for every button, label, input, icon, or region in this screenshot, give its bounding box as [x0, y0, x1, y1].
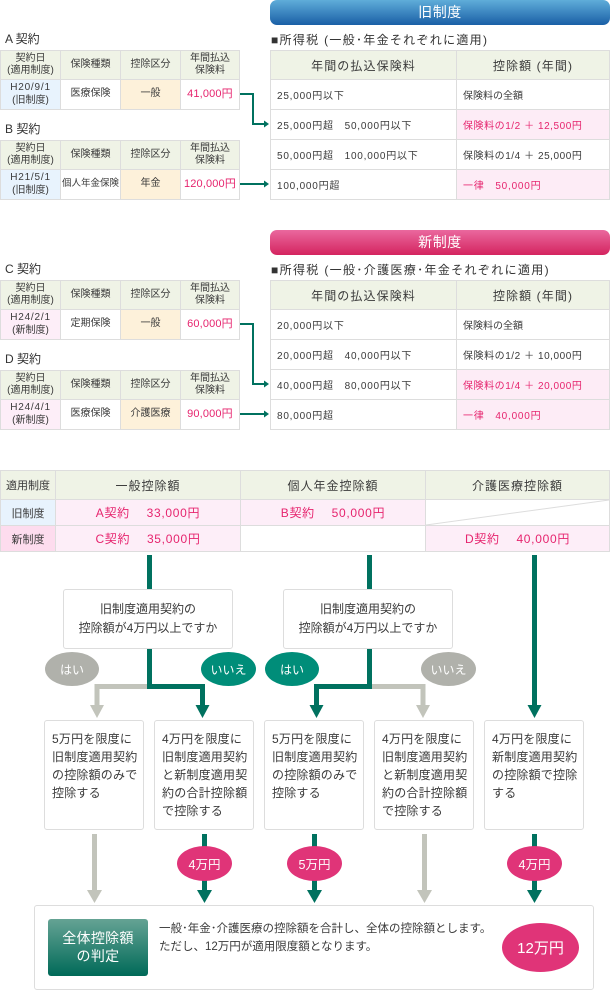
arrows: contracts to tables [240, 93, 269, 418]
contract C table: 保険料 [195, 295, 225, 306]
summary table: 個人年金控除額 [287, 478, 378, 492]
old system deduction table: 控除額 (年間) [493, 58, 573, 72]
summary table: 適用制度 [6, 480, 50, 492]
contract B table: 契約日 [15, 142, 45, 154]
contract B table [0, 140, 240, 200]
badge: 12万円 [502, 923, 579, 972]
oval: yes left [45, 652, 99, 686]
contract D table: 年間払込 [190, 372, 230, 384]
contract B table: 個人年金保険 [62, 178, 119, 189]
new system deduction table: 控除額 (年間) [493, 288, 573, 302]
result box 3: 5万円を限度に 旧制度適用契約 の控除額のみで 控除する [272, 732, 357, 800]
contract A table: 41,000円 [187, 88, 233, 100]
contract A table: (旧制度) [12, 94, 49, 106]
judgement label [48, 919, 148, 976]
summary table: 介護医療控除額 [472, 478, 563, 492]
contract A table [0, 50, 240, 110]
contract A table: 保険種類 [70, 59, 110, 70]
contract D table: 医療保険 [70, 408, 110, 419]
new system deduction table: 20,000円以下 [277, 321, 345, 332]
old system deduction table: 保険料の全額 [463, 91, 523, 102]
badge: 4万円: 4万円 [189, 858, 220, 872]
question box left: 旧制度適用契約の [100, 602, 196, 616]
old system deduction table: 100,000円超 [277, 181, 340, 192]
old system deduction table: 50,000円超 100,000円以下 [277, 151, 419, 162]
contract B table: (旧制度) [12, 184, 49, 196]
result box 2 [154, 720, 254, 830]
contract B table: 保険種類 [70, 149, 110, 160]
question box left: 控除額が4万円以上ですか [79, 621, 217, 635]
contract D table: 保険種類 [70, 379, 110, 390]
badge: 12万円: 12万円 [517, 940, 564, 957]
result box 3 [264, 720, 364, 830]
new system banner: 新制度 [418, 234, 462, 250]
contract A table: 一般 [140, 88, 160, 99]
contract C table: 契約日 [15, 282, 45, 294]
contract C table: H24/2/1 [10, 312, 51, 323]
contract D table [0, 370, 240, 430]
result box 5: 4万円を限度に 新制度適用契約 の控除額で控除 する [492, 732, 577, 800]
summary table: C契約 35,000円 [95, 532, 201, 546]
contract C table: 60,000円 [187, 318, 233, 330]
summary table: 一般控除額 [115, 478, 180, 492]
old system banner: 旧制度 [418, 4, 462, 20]
badge: 4万円 [507, 846, 562, 881]
badge: 4万円 [177, 846, 232, 881]
contract D table: 保険料 [195, 385, 225, 396]
contract B table: 控除区分 [130, 149, 170, 160]
result box 2: 4万円を限度に 旧制度適用契約 と新制度適用契 約の合計控除額 で控除する [162, 732, 247, 818]
oval: yes left: はい [60, 662, 84, 676]
contract C table: 年間払込 [190, 282, 230, 294]
summary table: A契約 33,000円 [96, 506, 200, 520]
contract B table: 120,000円 [184, 178, 236, 190]
result box 1 [44, 720, 144, 830]
contract D table: H24/4/1 [10, 402, 51, 413]
new system deduction table: 保険料の全額 [463, 321, 523, 332]
old system deduction table: 一律 50,000円 [463, 181, 541, 192]
old system heading: ■所得税 (一般･年金それぞれに適用) [271, 33, 488, 47]
contract A table: 医療保険 [70, 88, 110, 99]
judgement text: 一般･年金･介護医療の控除額を合計し、全体の控除額とします。 [159, 923, 491, 935]
new system deduction table: 40,000円超 80,000円以下 [277, 381, 412, 392]
new system banner [270, 230, 610, 255]
contract D table: 控除区分 [130, 379, 170, 390]
contract C table: 一般 [140, 318, 160, 329]
result box 4: 4万円を限度に 旧制度適用契約 と新制度適用契 約の合計控除額 で控除する [382, 732, 467, 818]
old system deduction table: 25,000円超 50,000円以下 [277, 121, 412, 132]
contract D table: (適用制度) [7, 385, 54, 396]
contract B table: 年間払込 [190, 142, 230, 154]
new system deduction table: 保険料の1/4 ＋ 20,000円 [463, 381, 582, 392]
oval: no center: いいえ [430, 662, 466, 676]
contract A table: 保険料 [195, 65, 225, 76]
contract D table: (新制度) [12, 414, 49, 426]
contract B table: 保険料 [195, 155, 225, 166]
old system deduction table: 年間の払込保険料 [311, 58, 416, 72]
contract D table: 介護医療 [130, 408, 170, 419]
oval: no center [421, 652, 476, 686]
judgement text: ただし、12万円が適用限度額となります。 [159, 941, 377, 953]
summary table: D契約 40,000円 [465, 532, 570, 546]
oval: no left: いいえ [210, 662, 246, 676]
contract D label: D 契約 [5, 352, 41, 366]
contract A table: 控除区分 [130, 59, 170, 70]
question box left [63, 589, 233, 649]
contract C table: 保険種類 [70, 289, 110, 300]
contract A label: A 契約 [5, 32, 40, 46]
question box center [283, 589, 453, 649]
oval: yes center [265, 652, 319, 686]
contract C table: (適用制度) [7, 295, 54, 306]
contract B table: 年金 [140, 178, 160, 189]
summary table: B契約 50,000円 [281, 506, 385, 520]
contract C label: C 契約 [5, 262, 41, 276]
contract A table: H20/9/1 [10, 82, 51, 93]
summary table [0, 470, 610, 552]
new system deduction table [270, 280, 610, 430]
oval: no left [201, 652, 256, 686]
new system deduction table: 一律 40,000円 [463, 411, 541, 422]
contract B label: B 契約 [5, 122, 40, 136]
question box center: 旧制度適用契約の [320, 602, 416, 616]
judgement label: の判定 [77, 948, 119, 964]
new system heading: ■所得税 (一般･介護医療･年金それぞれに適用) [271, 263, 550, 277]
contract B table: (適用制度) [7, 155, 54, 166]
summary table: 旧制度 [12, 508, 44, 520]
new system deduction table: 20,000円超 40,000円以下 [277, 351, 412, 362]
badge: 4万円: 4万円 [519, 858, 550, 872]
contract B table: H21/5/1 [10, 172, 51, 183]
new system deduction table: 年間の払込保険料 [311, 288, 416, 302]
contract C table: 定期保険 [70, 318, 110, 329]
old system deduction table: 保険料の1/2 ＋ 12,500円 [463, 121, 582, 132]
contract D table: 契約日 [15, 372, 45, 384]
result box 5 [484, 720, 584, 830]
summary table: 新制度 [12, 534, 44, 546]
old system deduction table: 25,000円以下 [277, 91, 345, 102]
contract A table: (適用制度) [7, 65, 54, 76]
oval: yes center: はい [280, 662, 304, 676]
result box 1: 5万円を限度に 旧制度適用契約 の控除額のみで 控除する [52, 732, 137, 800]
result box 4 [374, 720, 474, 830]
judgement label: 全体控除額 [62, 930, 134, 946]
old system banner [270, 0, 610, 25]
judgement text [159, 922, 491, 953]
contract A table: 契約日 [15, 52, 45, 64]
contract C table: (新制度) [12, 324, 49, 336]
old system deduction table [270, 50, 610, 200]
overall judgement panel [34, 905, 594, 990]
new system deduction table: 保険料の1/2 ＋ 10,000円 [463, 351, 582, 362]
badge: 5万円: 5万円 [299, 858, 330, 872]
question box center: 控除額が4万円以上ですか [299, 621, 437, 635]
old system deduction table: 保険料の1/4 ＋ 25,000円 [463, 151, 582, 162]
flow arrows [87, 555, 542, 903]
new system deduction table: 80,000円超 [277, 411, 334, 422]
badge: 5万円 [287, 846, 342, 881]
contract C table [0, 280, 240, 340]
contract C table: 控除区分 [130, 289, 170, 300]
contract D table: 90,000円 [187, 408, 233, 420]
contract A table: 年間払込 [190, 52, 230, 64]
